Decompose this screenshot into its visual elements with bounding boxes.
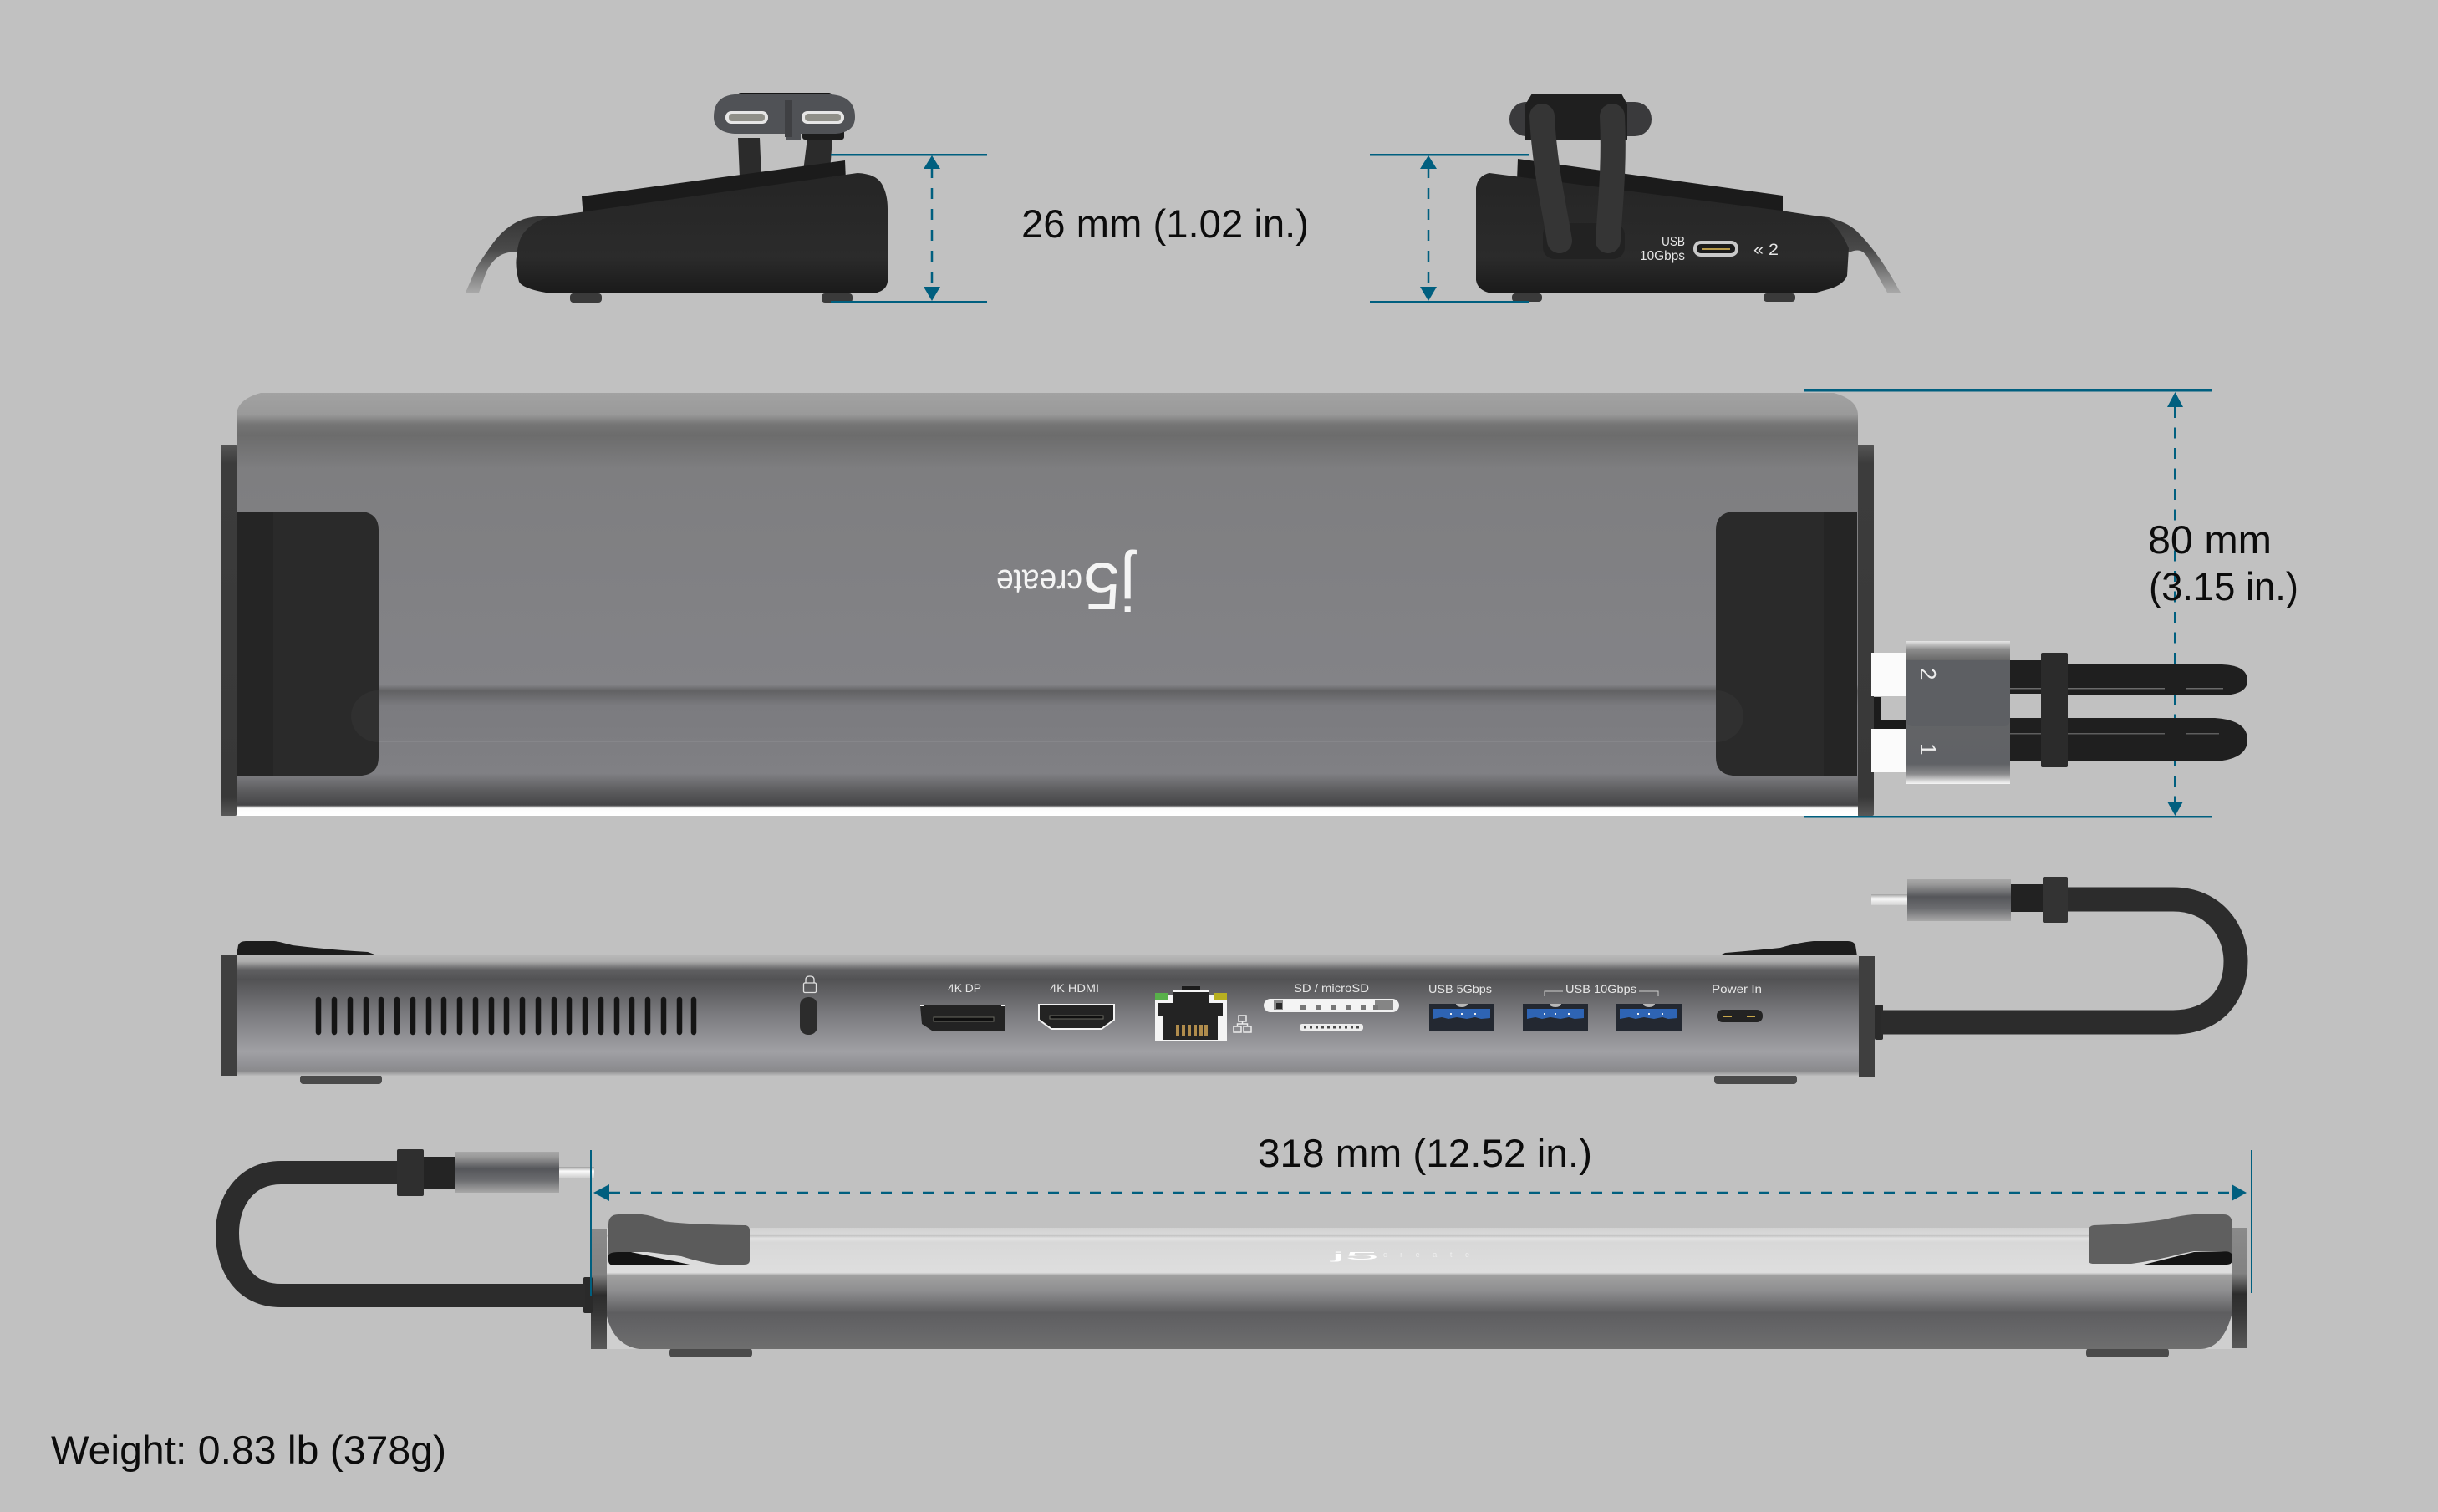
end caps — [221, 445, 1874, 816]
dimension: 318 mm — [590, 1150, 2252, 1296]
label: 4K HDMI: 4K HDMI — [1050, 981, 1099, 995]
right pad — [2089, 1214, 2232, 1265]
network icon — [1234, 1016, 1251, 1032]
RJ45 Ethernet port — [1155, 986, 1227, 1041]
dimension: 26 mm (left) — [831, 154, 987, 303]
left pad — [608, 1214, 750, 1265]
feet — [1512, 293, 1795, 302]
j5create logo, upside down: create — [996, 563, 1082, 602]
laptop plate — [1517, 159, 1783, 219]
port label: USB — [1662, 235, 1685, 249]
side view: cable end — [466, 93, 888, 303]
USB port 5Gbps — [1429, 1004, 1494, 1031]
cooling vents — [318, 1000, 694, 1032]
body — [607, 1228, 2232, 1349]
upper cable loop — [2010, 660, 2247, 695]
lower cable loop — [2010, 718, 2247, 761]
faint logo: create — [1383, 1250, 1469, 1259]
feet — [669, 1348, 2169, 1357]
cable stub — [583, 1277, 593, 1313]
USB port 10Gbps one — [1523, 1004, 1588, 1031]
neck — [2011, 884, 2043, 912]
port label: 10Gbps — [1640, 249, 1685, 263]
label: 80 mm: 80 mm — [2148, 517, 2272, 562]
dock body — [516, 173, 888, 293]
end caps — [591, 1228, 2247, 1349]
body — [237, 955, 1859, 1076]
rubber wedges on top — [237, 941, 1857, 956]
end caps — [221, 955, 1875, 1077]
DisplayPort port — [920, 1005, 1005, 1031]
label: 26 mm: 26 mm (1.02 in.) — [1021, 201, 1309, 246]
HDMI port — [1039, 1005, 1114, 1029]
cable stub on dock — [1875, 1005, 1883, 1040]
cable recess — [1543, 223, 1625, 259]
cable fading to floor — [1814, 216, 1901, 293]
looped cables — [1542, 116, 1613, 241]
label: Power In: Power In — [1712, 982, 1762, 995]
connector cables — [738, 138, 832, 177]
USB-C cable, front view — [1871, 877, 2236, 1040]
plug pin — [1871, 894, 1907, 905]
label: 318 mm: 318 mm (12.52 in.) — [1258, 1131, 1592, 1175]
j5create logo, upside down: j5 — [1083, 549, 1137, 624]
dock body — [1476, 173, 1849, 293]
right rubber pad — [1716, 512, 1857, 776]
faint logo — [1326, 1250, 1469, 1262]
cable strap — [2041, 653, 2068, 767]
label: USB 10Gbps with bracket — [1545, 982, 1658, 996]
connector head rear — [1509, 94, 1652, 140]
left rubber pad — [237, 512, 379, 776]
label: USB 10Gbps with bracket: USB 10Gbps — [1565, 982, 1636, 995]
dimension: 80 mm — [1804, 389, 2212, 817]
connector barrel — [1907, 879, 2011, 921]
cable loop — [227, 1173, 585, 1296]
feet — [300, 1075, 1797, 1084]
USB-C port — [1693, 241, 1738, 257]
port label — [1640, 235, 1685, 263]
strap — [397, 1149, 424, 1196]
label: 80 mm: (3.15 in.) — [2149, 564, 2298, 608]
dark stub between plugs — [1874, 697, 1906, 729]
SD card slot — [1264, 999, 1399, 1012]
strap — [2043, 877, 2068, 923]
label: quantity two: « 2 — [1753, 242, 1779, 259]
connector head: 1 — [1916, 743, 1941, 755]
connector barrel — [455, 1152, 559, 1193]
dimension: 26 mm (right) — [1370, 154, 1529, 303]
lock slot — [800, 997, 817, 1035]
USB port 10Gbps two — [1616, 1004, 1682, 1031]
top view of dock — [221, 393, 1874, 816]
cable fading to floor — [466, 216, 552, 293]
connector head with two USB-C ports — [714, 93, 855, 140]
light underlay at corners — [607, 1304, 2232, 1349]
label: 4K DP: 4K DP — [948, 981, 981, 995]
connector head — [1906, 641, 2010, 784]
laptop plate — [582, 160, 846, 219]
neck — [424, 1157, 455, 1189]
label: USB 5Gbps: USB 5Gbps — [1428, 982, 1492, 995]
label: SD / microSD: SD / microSD — [1294, 981, 1369, 995]
lock icon — [804, 976, 816, 993]
label: 80 mm — [2148, 517, 2298, 608]
feet — [570, 293, 853, 303]
front view of dock with ports — [221, 941, 1875, 1084]
cable overlap on 80 mm guide — [2165, 664, 2186, 761]
USB-C cable, bottom view — [227, 1149, 594, 1313]
USB-C power port — [1717, 1010, 1763, 1022]
plug pin — [559, 1167, 594, 1178]
faint logo: j5 — [1326, 1250, 1379, 1262]
j5create logo, upside down — [996, 549, 1137, 624]
cable loop — [1881, 899, 2236, 1022]
aluminium body — [237, 393, 1858, 816]
microSD slot — [1300, 1024, 1363, 1031]
bottom view of dock — [591, 1214, 2247, 1357]
weight note: Weight: 0.83 lb (378g) — [51, 1428, 446, 1472]
dual USB-C cable, top view — [1871, 641, 2247, 784]
USB-C plug tips — [1871, 653, 1906, 772]
connector head: 2 — [1916, 668, 1941, 680]
side view: port end — [1476, 94, 1901, 302]
